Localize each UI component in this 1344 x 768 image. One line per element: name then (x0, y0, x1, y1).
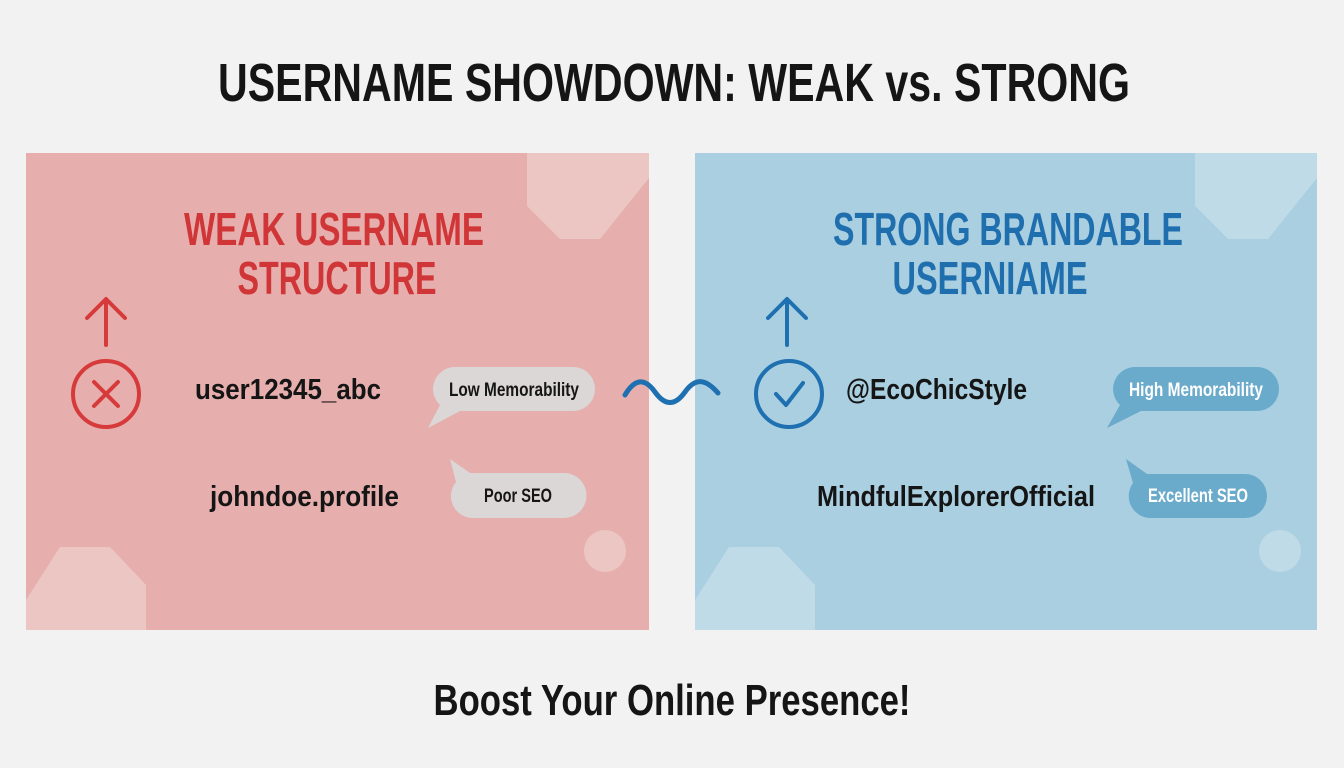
text: @EcoChicStyle: @EcoChicStyle (846, 374, 1027, 406)
bubble: excellent seo: Excellent SEO (1148, 486, 1248, 507)
footer tagline: Boost Your Online Presence! (434, 676, 910, 725)
text: MindfulExplorerOfficial: MindfulExplorerOfficial (817, 481, 1095, 513)
heading: weak: WEAK USERNAME (184, 203, 484, 255)
icon: up arrow red (87, 299, 125, 345)
heading: weak: STRUCTURE (238, 252, 436, 304)
connector: wave (625, 382, 718, 402)
bubble: excellent seo (1126, 459, 1267, 518)
bubble: poor seo: Poor SEO (484, 486, 552, 507)
heading: strong (833, 203, 1183, 304)
text: user12345_abc: user12345_abc (195, 374, 381, 406)
heading: weak (184, 203, 484, 304)
heading: strong: USERNIAME (892, 252, 1088, 304)
bubble: high memorability: High Memorability (1129, 380, 1263, 401)
text: johndoe.profile: johndoe.profile (209, 481, 399, 513)
bubble: low memorability (428, 367, 595, 428)
panel: strong (695, 153, 1317, 630)
bubble: high memorability (1107, 367, 1279, 428)
bubble: low memorability: Low Memorability (449, 380, 579, 401)
icon: up arrow blue (768, 299, 806, 345)
icon: x circle (73, 361, 139, 427)
panel: weak (26, 153, 649, 630)
heading: strong: STRONG BRANDABLE (833, 203, 1183, 255)
bubble: poor seo (450, 459, 586, 518)
icon: check circle (756, 361, 822, 427)
